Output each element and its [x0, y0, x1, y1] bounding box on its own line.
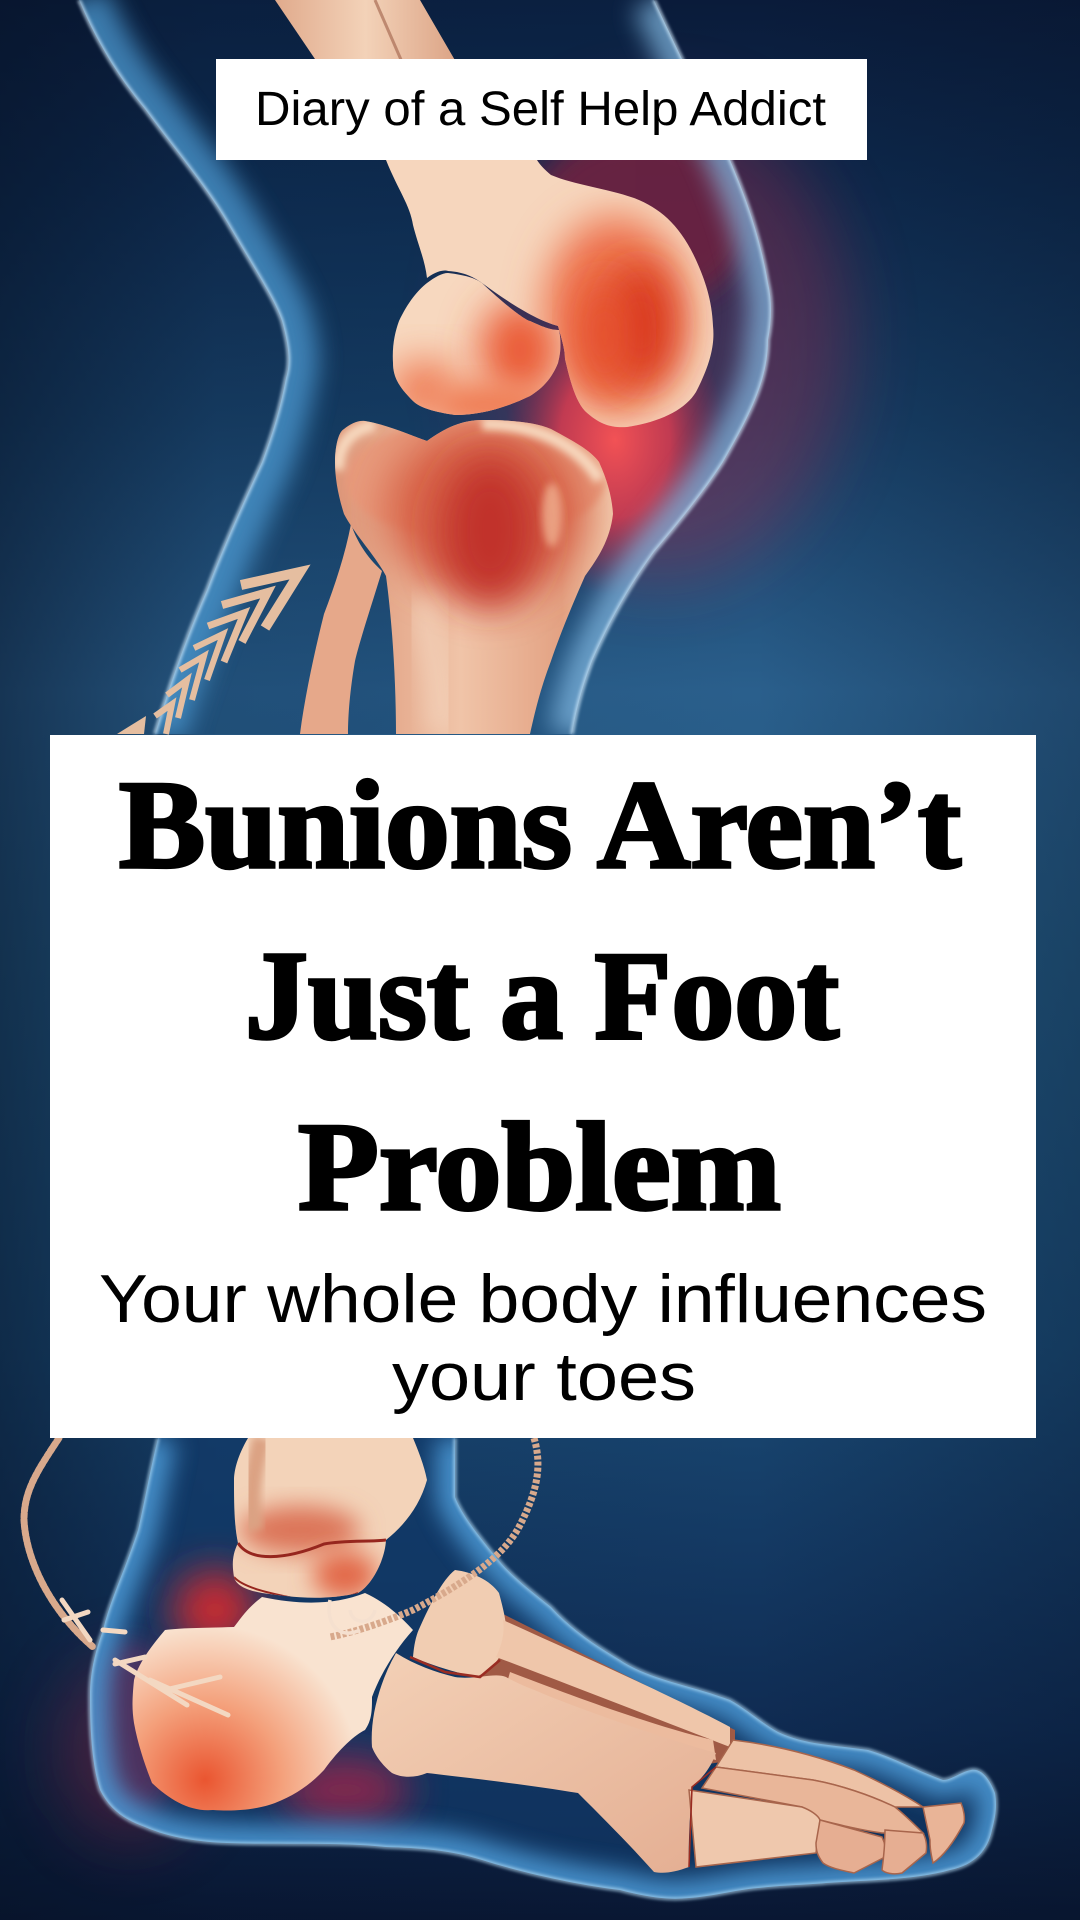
leg outline [79, 0, 771, 734]
subheadline [99, 1261, 987, 1415]
foot outline [90, 1438, 996, 1899]
headline: Bunions Aren’t [119, 756, 961, 895]
lower tibia and talus [232, 1438, 427, 1598]
dark red joint lines [410, 1657, 716, 1867]
rope arrow: right band [329, 1438, 538, 1637]
middle metatarsal [505, 1672, 716, 1760]
subheadline: Your whole body influences [99, 1261, 987, 1337]
tibia [330, 415, 620, 735]
femur condyle [380, 155, 720, 435]
brand banner [216, 59, 867, 160]
brand name: Diary of a Self Help Addict [255, 83, 826, 136]
headline [119, 756, 961, 1237]
title panel [50, 735, 1036, 1438]
leg silhouette [79, 0, 771, 734]
inflammation glow: heel [60, 1660, 200, 1840]
rope arrow: left band [24, 1438, 228, 1715]
midfoot shadow behind metatarsals [470, 1612, 735, 1780]
patella [392, 273, 560, 415]
headline: Just a Foot [245, 927, 839, 1066]
big metatarsal [372, 1653, 716, 1873]
headline: Problem [298, 1098, 781, 1237]
fibula [300, 524, 382, 734]
chevron arrow: upward force [117, 572, 300, 734]
midfoot bones [413, 1570, 507, 1677]
inflammation glow: knee [470, 100, 850, 580]
toe phalanges [689, 1740, 964, 1874]
foot silhouette [90, 1438, 996, 1899]
illustration: foot and ankle [24, 1430, 1020, 1920]
calcaneus heel bone [132, 1593, 413, 1811]
subheadline: your toes [392, 1339, 696, 1415]
illustration: knee joint [0, 0, 850, 740]
femur shaft bones [275, 0, 456, 62]
top metatarsal [496, 1620, 730, 1747]
